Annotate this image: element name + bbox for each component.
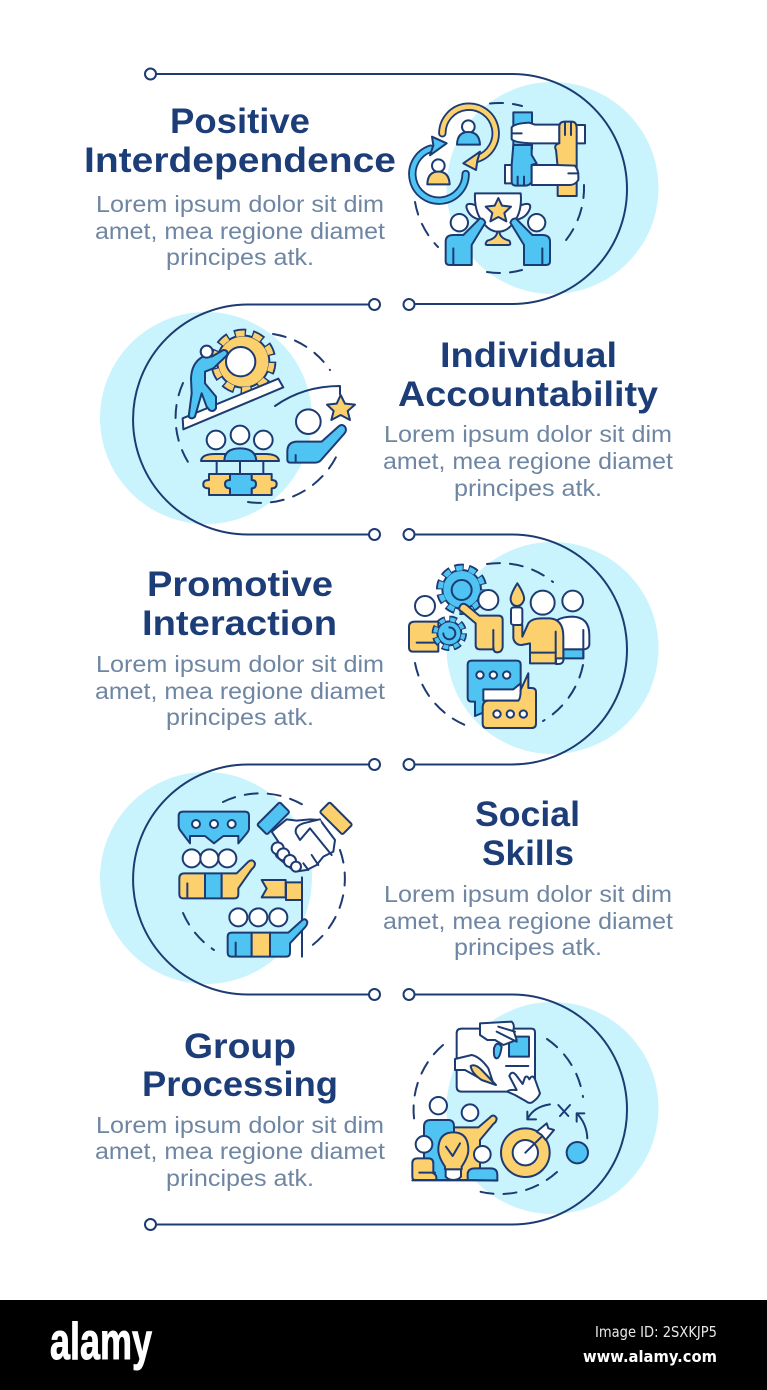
- text block: Group Processing: Group: [184, 1027, 296, 1066]
- text block: Social Skills: Lorem ipsum dolor sit dim: [384, 881, 672, 907]
- icon: team with puzzle pieces: [201, 426, 279, 495]
- text block: Individual Accountability: Individual: [440, 336, 617, 375]
- text block: Positive Interdependence: Lorem ipsum dolor sit dim: [96, 191, 384, 217]
- footer bar: [0, 1300, 767, 1390]
- icon: planning board with hands: [455, 1022, 540, 1103]
- icon: team with light bulb: [412, 1097, 497, 1181]
- footer url: www.alamy.com: [583, 1347, 717, 1366]
- dashed ring: panel 4: [183, 793, 345, 950]
- text block: Positive Interdependence: principes atk.: [166, 244, 314, 270]
- panel 2 icons: gear pusher, rewarded person, puzzle team: [183, 333, 355, 495]
- connector line: panel 2: [133, 299, 380, 540]
- background circle: panel 2: [100, 312, 312, 524]
- text block: Promotive Interaction: principes atk.: [166, 704, 314, 730]
- background circle: panel 5: [446, 1002, 658, 1214]
- text block: Positive Interdependence: Interdependence: [84, 141, 396, 180]
- icon: person pointing at gear: [440, 568, 503, 652]
- panel 4 icons: chat team, handshake, flag team: [179, 802, 352, 957]
- background circle: panel 1: [446, 82, 658, 294]
- text block: Promotive Interaction: [95, 565, 386, 730]
- connector line: panel 3: [404, 529, 627, 770]
- connector line: panel 5: [145, 989, 627, 1230]
- text block: Individual Accountability: Lorem ipsum dolor sit dim: [384, 421, 672, 447]
- footer logo: alamy: [50, 1313, 152, 1371]
- text block: Individual Accountability: [383, 336, 674, 501]
- icon: four linked hands: [505, 112, 585, 196]
- icon: team with raised paintbrush: [511, 583, 589, 664]
- panel 3 icons: gears team, painter team, chat bubbles: [409, 568, 589, 728]
- icon: person with small gear: [409, 596, 463, 652]
- text block: Group Processing: principes atk.: [166, 1165, 314, 1191]
- text block: Social Skills: principes atk.: [454, 934, 602, 960]
- panel 1 icons: cycle, joined hands, trophy team: [412, 107, 585, 265]
- text block: Individual Accountability: principes atk.: [454, 475, 602, 501]
- dashed ring: panel 5: [414, 1039, 583, 1194]
- text block: Individual Accountability: amet, mea regione diamet: [383, 448, 674, 474]
- connector line: panel 4: [133, 759, 380, 1000]
- dashed ring: panel 2: [176, 334, 338, 503]
- text block: Group Processing: Lorem ipsum dolor sit dim: [96, 1112, 384, 1138]
- background circle: panel 3: [446, 542, 658, 754]
- icon: person pushing gear up a ramp: [183, 333, 283, 429]
- footer image id: Image ID: 2SXKJP5: [595, 1323, 717, 1341]
- dashed ring: panel 1: [415, 103, 584, 273]
- icon: chat bubbles: [468, 661, 536, 728]
- text block: Promotive Interaction: Promotive: [147, 565, 333, 604]
- text block: Positive Interdependence: amet, mea regione diamet: [95, 218, 386, 244]
- text block: Social Skills: [383, 795, 674, 960]
- dashed ring: panel 3: [415, 563, 583, 727]
- text block: Promotive Interaction: Interaction: [142, 604, 337, 643]
- text block: Group Processing: Processing: [142, 1065, 338, 1104]
- icon: team lifting trophy: [446, 193, 550, 265]
- icon: speech bubble over team: [179, 812, 255, 898]
- text block: Promotive Interaction: amet, mea regione diamet: [95, 678, 386, 704]
- icon: target with arrow: [501, 1104, 588, 1177]
- text block: Social Skills: Social: [475, 795, 580, 834]
- text block: Social Skills: amet, mea regione diamet: [383, 908, 674, 934]
- text block: Positive Interdependence: Positive: [170, 102, 310, 141]
- text block: Positive Interdependence: [84, 102, 396, 270]
- icon: exchange arrows with two people: [412, 107, 496, 201]
- panel 5 icons: planning board, target, team with idea: [412, 1022, 588, 1181]
- icon: handshake: [257, 802, 352, 872]
- connector line: panel 1: [145, 68, 627, 310]
- text block: Social Skills: Skills: [482, 834, 574, 873]
- text block: Group Processing: amet, mea regione diamet: [95, 1138, 386, 1164]
- text block: Individual Accountability: Accountability: [398, 375, 659, 414]
- icon: person reaching for star: [275, 386, 355, 463]
- text block: Group Processing: [95, 1027, 386, 1191]
- text block: Promotive Interaction: Lorem ipsum dolor sit dim: [96, 651, 384, 677]
- icon: team with flag: [228, 877, 307, 957]
- background circle: panel 4: [100, 772, 312, 984]
